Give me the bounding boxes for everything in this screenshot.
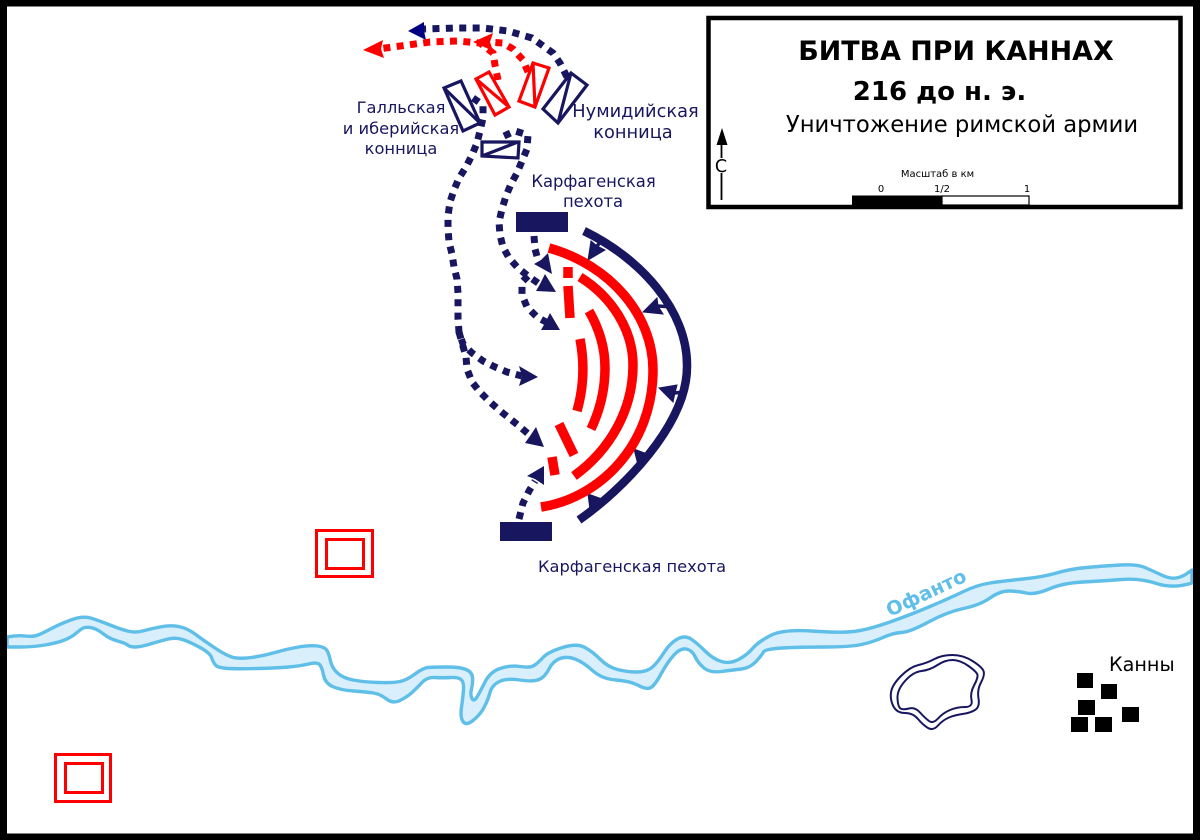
label: Carthaginian infantry upper <box>531 172 656 211</box>
Roman camp: upper <box>316 530 372 576</box>
town: Cannae buildings <box>1071 673 1139 732</box>
arrow: cavalry to rear centre <box>448 98 538 386</box>
arrow: Roman cavalry flight long <box>363 40 498 80</box>
label: Numidian cavalry: Нумидийская <box>572 101 699 122</box>
Roman army lines <box>541 248 653 507</box>
arc arrowheads <box>588 238 683 510</box>
north arrow: С <box>715 157 727 177</box>
label: Gallic and Iberian cavalry: Галльская <box>357 98 445 117</box>
arrow: upper infantry advance <box>534 236 552 274</box>
arrow: lower infantry advance <box>519 466 544 519</box>
arrow: detachment branch <box>522 276 560 330</box>
label: Numidian cavalry <box>572 101 699 143</box>
unit: Roman cavalry left <box>476 72 509 115</box>
scale bar: 0 <box>878 184 884 195</box>
hill <box>891 655 984 729</box>
Carthaginian infantry block: upper <box>516 212 568 232</box>
title: БИТВА ПРИ КАННАХ <box>798 36 1114 67</box>
arrow: Roman cavalry flight short <box>473 33 528 72</box>
arrow: detachment to rear upper <box>499 131 556 292</box>
unit: Numidian cavalry <box>543 73 587 123</box>
label: Carthaginian infantry upper: Карфагенская <box>531 172 656 191</box>
Carthaginian encircling arc <box>579 231 687 520</box>
unit: Roman cavalry right <box>519 63 549 107</box>
arrow: cavalry to rear lower <box>459 332 544 447</box>
scale bar: Масштаб в км <box>901 169 974 180</box>
river label: Ofanto: Офанто <box>882 564 970 622</box>
unit: Gallic and Iberian cavalry <box>444 81 480 131</box>
Carthaginian infantry block: lower <box>500 522 552 541</box>
label: Gallic and Iberian cavalry: конница <box>365 139 437 158</box>
cavalry units and movements <box>363 22 587 447</box>
label: Gallic and Iberian cavalry: и иберийская <box>343 119 459 138</box>
date: 216 до н. э. <box>853 77 1026 107</box>
scale bar: 1 <box>1024 184 1030 195</box>
Roman camp: lower <box>56 754 110 802</box>
label: Carthaginian infantry upper: пехота <box>563 192 623 211</box>
subtitle: Уничтожение римской армии <box>786 112 1138 138</box>
town label: Cannae: Канны <box>1109 653 1175 676</box>
label: Numidian cavalry: конница <box>593 122 673 143</box>
scale bar: 1/2 <box>934 184 950 195</box>
scale bar <box>852 169 1030 205</box>
north arrow <box>715 128 728 200</box>
arrow: Numidian pursuit <box>408 22 567 77</box>
label: Gallic and Iberian cavalry <box>343 98 459 158</box>
title box <box>708 18 1180 207</box>
unit: small cavalry detachment <box>482 142 519 158</box>
river: Ofanto <box>7 565 1192 724</box>
label: Carthaginian infantry lower: Карфагенская пехота <box>538 557 726 576</box>
